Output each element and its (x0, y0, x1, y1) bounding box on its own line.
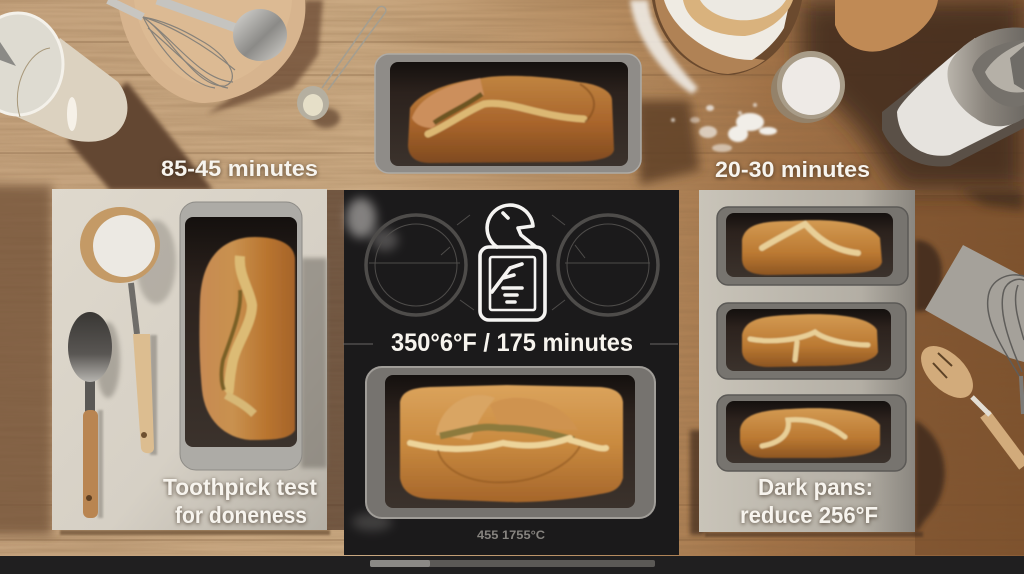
small pan 2 (717, 303, 906, 379)
left napkin (52, 189, 327, 530)
left oven dial (366, 215, 474, 315)
small pan 3 (717, 395, 906, 471)
steel canister (882, 28, 1024, 167)
spilled flour (630, 0, 777, 152)
ceramic jug (0, 13, 127, 142)
wooden mug (835, 0, 938, 52)
left loaf (199, 237, 295, 440)
flour scoop (80, 207, 160, 453)
salt cup (771, 51, 845, 123)
top loaf pan (375, 54, 641, 173)
loaf 2 (742, 314, 878, 367)
flour bowl on wooden stand (652, 0, 802, 75)
napkin shadows (96, 220, 327, 518)
panel: central dark board (343, 190, 679, 555)
right caption: Dark pans: (758, 474, 873, 500)
loaf 1 (742, 220, 882, 275)
icon: timer tag (480, 205, 545, 320)
right heading: 20-30 minutes (715, 157, 870, 182)
celsius label: 455 1755°C (477, 528, 545, 542)
ladle (157, 0, 287, 61)
grey cloth (925, 245, 1024, 362)
central loaf pan (366, 367, 655, 518)
left loaf pan (180, 202, 302, 470)
wooden spoon (912, 337, 1024, 466)
left caption: for doneness (175, 502, 307, 528)
oven temperature label: 350°6°F / 175 minutes (391, 329, 633, 357)
top loaf (408, 76, 614, 163)
flour dusting (346, 198, 398, 531)
board base bar (370, 560, 655, 567)
left caption (163, 474, 317, 528)
small measuring spoon (297, 6, 386, 128)
tray shadow (207, 0, 323, 114)
dark floor strip (0, 556, 1024, 574)
left heading: 85-45 minutes (161, 156, 318, 181)
right napkin (699, 190, 915, 532)
serving spoon (68, 312, 112, 518)
right oven dial (552, 215, 658, 315)
whisk (108, 0, 235, 88)
small pan 1 (717, 207, 908, 285)
left caption: Toothpick test (163, 474, 317, 500)
right caption: reduce 256°F (740, 502, 878, 528)
right caption (740, 474, 878, 528)
loaf 3 (740, 408, 880, 458)
right whisk (988, 275, 1024, 414)
central loaf (400, 385, 623, 502)
wooden tray (118, 0, 305, 103)
